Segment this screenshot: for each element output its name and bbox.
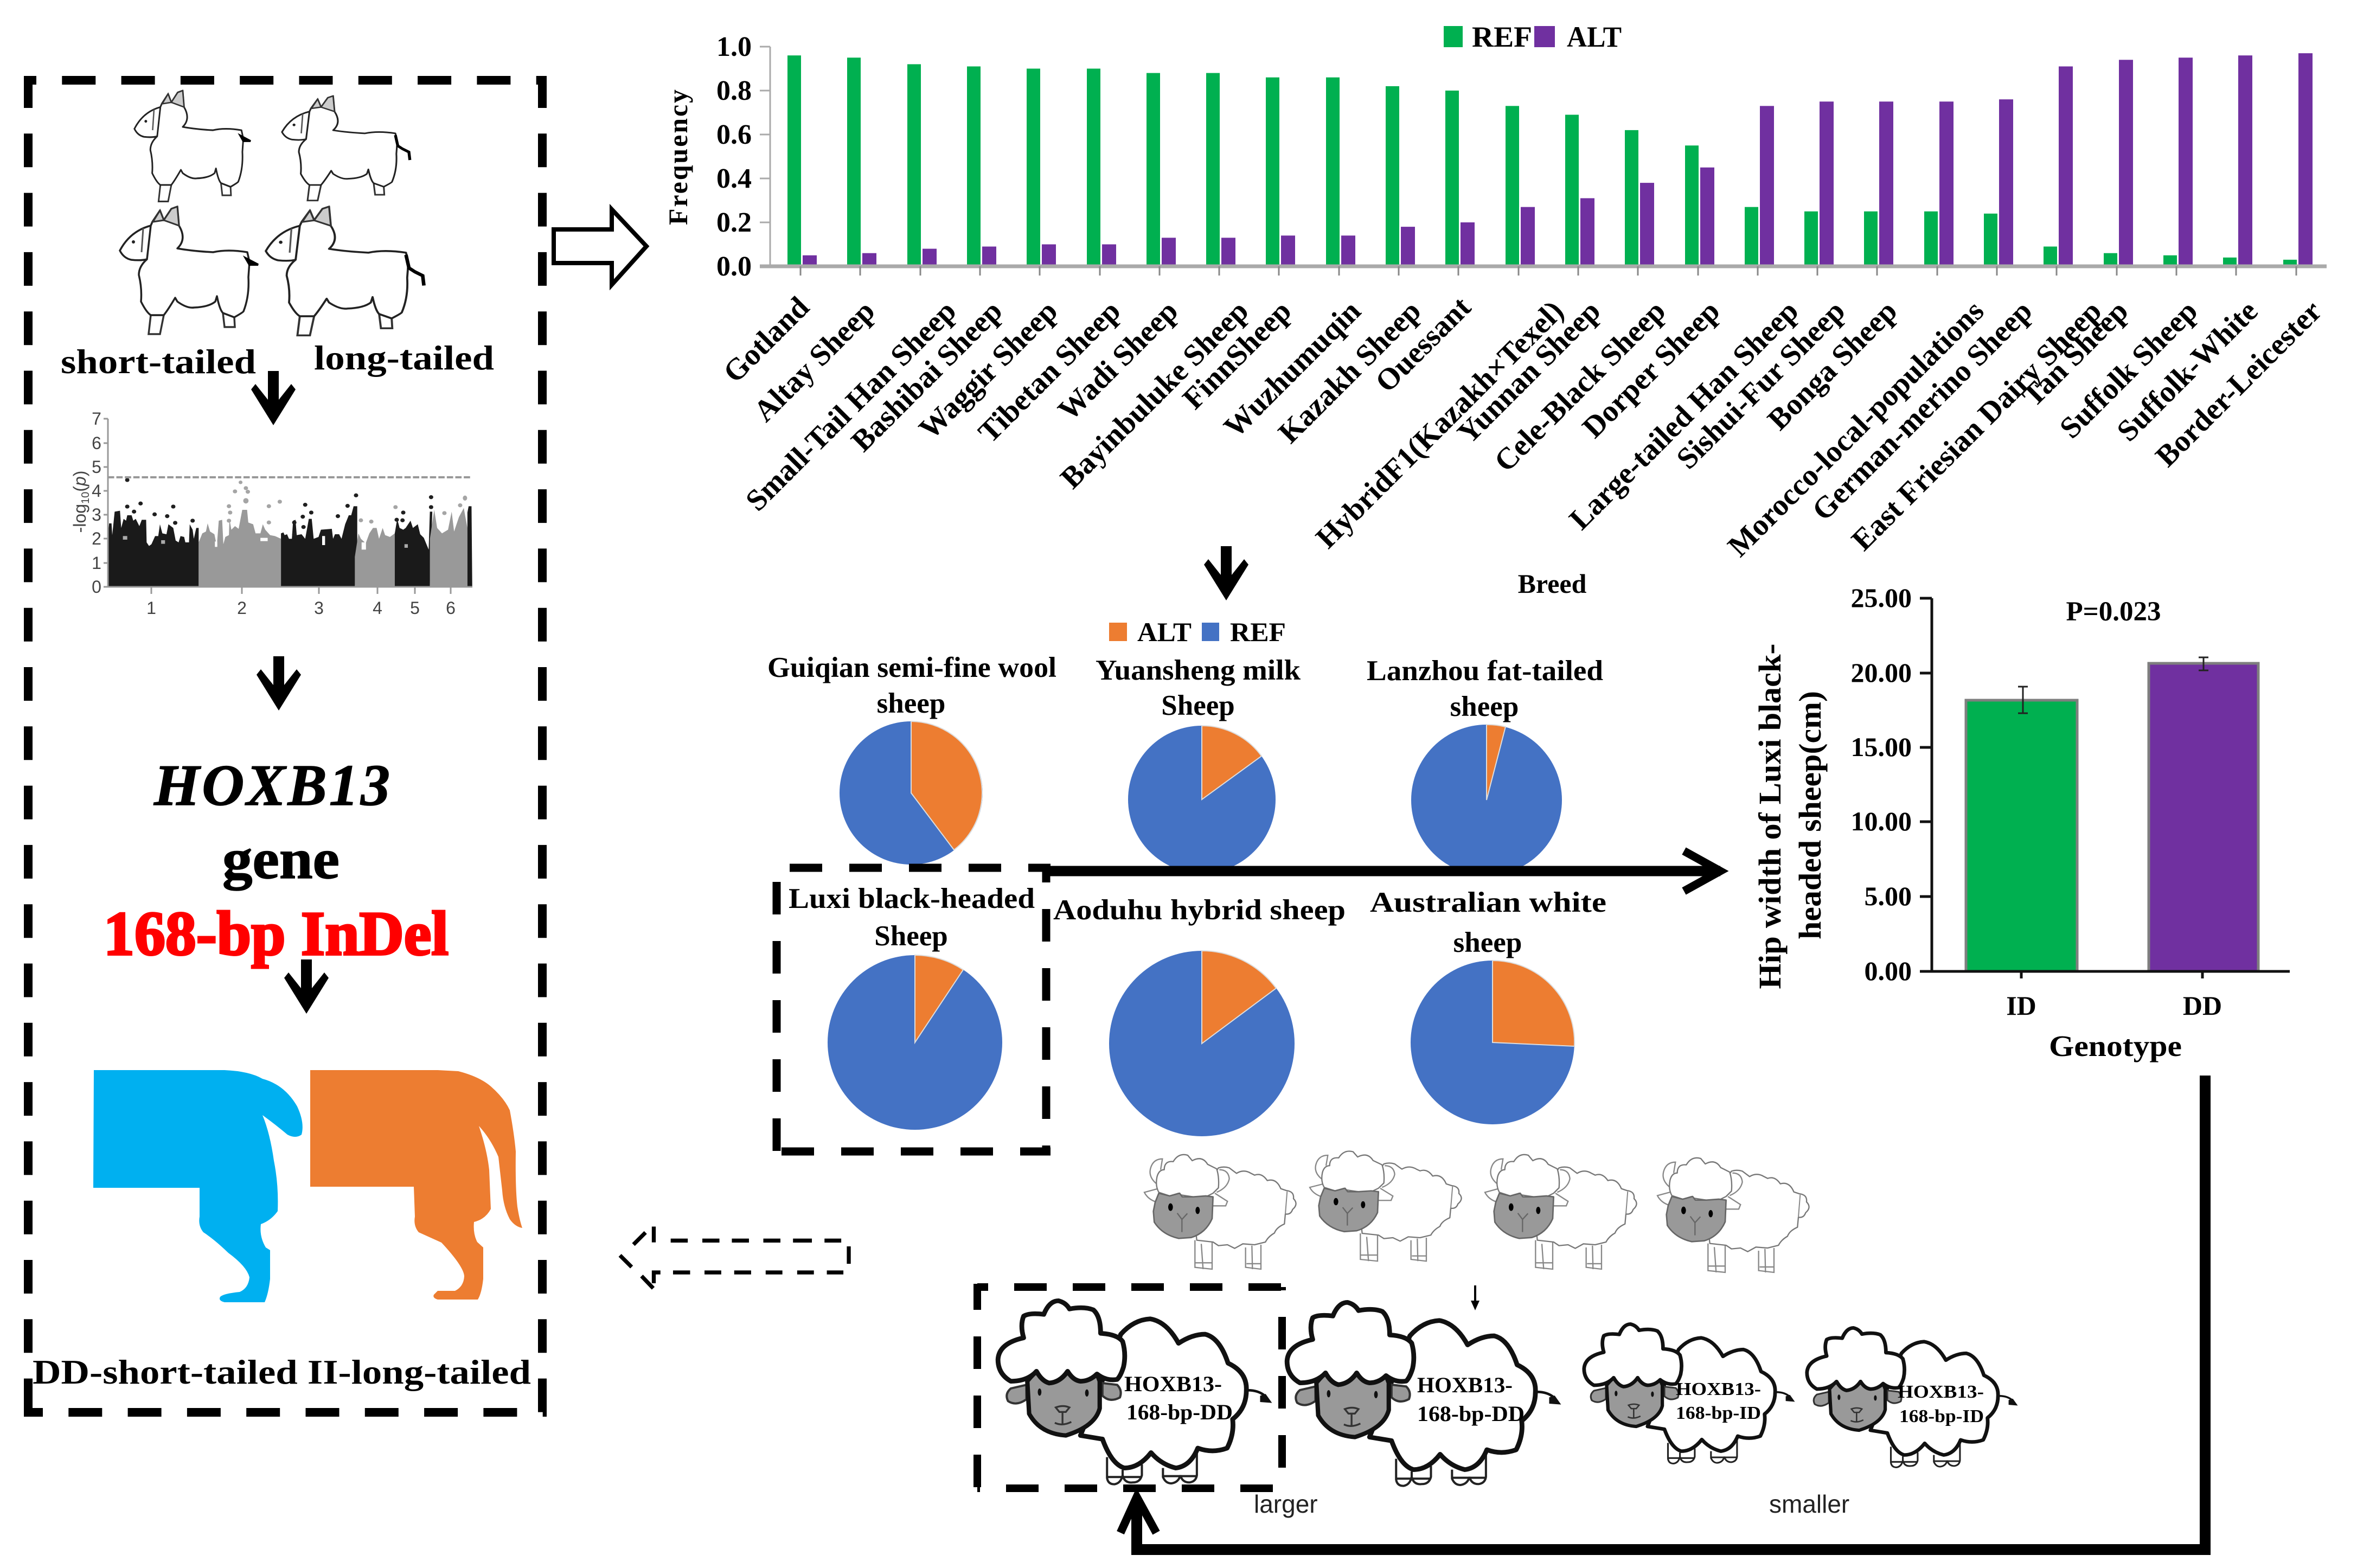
icon: DD sheep 2: 168-bp-DD [1417,1401,1525,1426]
chart: hip width by genotype: DD [2183,990,2222,1021]
label: smaller: smaller [1769,1490,1849,1518]
y axis labels: 0.2 [716,207,752,238]
chart: allele frequency by breed [663,21,2328,599]
icon: DD sheep 1: HOXB13- [1124,1372,1222,1396]
pie: Aoduhu hybrid sheep [1053,894,1346,1136]
pie: Aoduhu hybrid sheep: Aoduhu hybrid sheep [1053,894,1346,926]
y axis ticks: 10.00 [1850,806,1912,836]
axis numbers [92,409,456,618]
breed labels: Bonga Sheep [1761,294,1904,437]
icon: ID sheep 3: HOXB13- [1676,1379,1761,1399]
breed labels: Suffolk Sheep [2053,294,2204,445]
legend: REF and ALT: REF [1472,21,1532,53]
arrow: small down arrow [1471,1285,1479,1310]
callout: Luxi black-headed sheep dashed box [772,864,1051,1155]
axis numbers: 6 [446,598,456,618]
breed labels: FinnSheep [1176,294,1298,416]
y axis labels: 0.0 [716,251,752,282]
legend: pie ALT and REF: ALT [1137,617,1192,647]
arrow: thick elbow from hip width chart to selected sheep [1120,1076,2205,1550]
arrow: hollow right arrow to frequency chart [554,209,646,285]
y axis labels [716,31,752,282]
axes [760,47,2327,276]
axis numbers: 0 [92,577,101,597]
legend: pie ALT and REF: REF [1230,617,1286,647]
label: larger: larger [1254,1490,1318,1518]
icon: short-tailed sheep 3 [120,207,258,334]
pie: Luxi black-headed Sheep: Luxi black-headed [789,883,1035,914]
breed labels: Altay Sheep [747,294,881,428]
callout: selected DD sheep dashed box [977,1284,1282,1492]
axis title: ( [70,486,89,492]
y axis ticks: 0.00 [1865,956,1912,986]
legend: REF and ALT: ALT [1567,21,1622,53]
chart: hip width by genotype [1752,583,2290,1063]
breed labels: Yunnan Sheep [1451,294,1607,450]
axis numbers: 7 [92,409,101,428]
variant label: 168-bp InDel [104,899,449,968]
label: long-tailed: long-tailed [314,338,494,377]
y axis ticks: 5.00 [1865,881,1912,911]
points and chromosome blocks [108,477,472,587]
axis numbers: 1 [92,553,101,573]
icon: long-tailed sheep 2 [282,96,410,201]
panel: discovery workflow dashed box [24,76,547,1416]
arrow: frequency chart to pies [1204,546,1248,600]
breed labels: Waggir Sheep [913,294,1064,446]
axis numbers: 2 [237,598,247,618]
icon: upper sheep 4 [1657,1158,1809,1272]
breed labels: HybridF1(Kazakh×Texel) [1309,294,1570,555]
breed labels: Gotland [717,290,816,389]
icon: DD sheep 1: 168-bp-DD [1126,1400,1233,1424]
gene name: HOXB13 [153,753,390,818]
icon: ID sheep 3: 168-bp-ID [1676,1403,1761,1423]
icon: ID sheep 3 [1584,1324,1795,1463]
icon: upper sheep 3 [1485,1155,1637,1269]
bars: REF [787,55,2297,266]
axis numbers: 5 [92,457,101,477]
axis title: -log [70,504,89,533]
legend: REF and ALT [1444,21,1622,53]
bar: DD [2149,663,2258,971]
y axis ticks [1850,583,1912,986]
breed labels: Ouessant [1369,290,1477,399]
x axis title: Breed [1518,568,1587,599]
arrow: dashed left arrow back to workflow [620,1226,849,1288]
icon: upper sheep 1 [1144,1155,1296,1269]
axis numbers: 2 [92,529,101,548]
axis numbers: 3 [314,598,324,618]
y axis labels: 0.8 [716,75,752,106]
icon: DD sheep 1 [998,1301,1272,1484]
arrow: sheep to GWAS [251,371,296,425]
y axis labels: 0.4 [716,163,752,194]
icon: ID sheep 4 [1807,1328,2017,1467]
y axis title: Frequency [663,89,693,225]
breed labels: Bayinbuluke Sheep [1054,294,1255,495]
icon: ID sheep 4: 168-bp-ID [1899,1406,1984,1426]
pie: Guiqian semi-fine wool sheep: sheep [877,688,945,719]
bar: ID [1966,700,2077,971]
y axis labels: 0.6 [716,119,752,150]
breed labels: Kazakh Sheep [1272,294,1427,450]
pie: Guiqian semi-fine wool sheep [767,652,1056,865]
breed labels: Wadi Sheep [1052,294,1184,427]
y axis title: headed sheep(cm) [1792,691,1828,939]
breed labels: Border-Leicester [2149,294,2328,473]
y axis ticks: 20.00 [1850,657,1912,688]
pie: Australian white sheep [1370,887,1606,1124]
pie: Yuansheng milk Sheep: Sheep [1161,690,1235,721]
icon: long-tailed sheep 4 [266,207,424,335]
legend: pie ALT and REF [1109,617,1286,647]
y axis ticks: 15.00 [1850,732,1912,762]
pie: Yuansheng milk Sheep [1096,655,1301,873]
icon: DD sheep 2: HOXB13- [1417,1373,1513,1397]
p value: P=0.023 [2066,597,2161,627]
pie: Australian white sheep: Australian white [1370,887,1606,918]
breed labels: Tan Sheep [2016,294,2135,413]
breed labels: Sishui-Fur Sheep [1670,294,1852,476]
gene label: gene [222,827,340,891]
axis title: 10 [80,492,92,504]
breed labels: Suffolk-White [2111,294,2264,448]
caption: genotype to tail type: DD-short-tailed II-long-tailed [33,1353,531,1391]
axis numbers: 6 [92,433,101,453]
pie: Lanzhou fat-tailed sheep [1367,655,1603,875]
y axis ticks: 25.00 [1850,583,1912,613]
pie: Lanzhou fat-tailed sheep: sheep [1450,691,1519,722]
breed labels: Morocco-local-populations [1721,294,1990,564]
y axis title: Hip width of Luxi black- [1752,643,1788,989]
breed labels: Large-tailed Han Sheep [1563,294,1805,536]
label: short-tailed: short-tailed [61,342,256,381]
y axis labels: 1.0 [716,31,752,62]
breed labels [717,290,2328,564]
y axis title [1752,643,1828,989]
icon: ID sheep 4: HOXB13- [1898,1382,1984,1402]
pie: Australian white sheep: sheep [1453,927,1522,958]
icon: long tail silhouette [310,1070,522,1300]
axis numbers: 1 [146,598,156,618]
pie: Lanzhou fat-tailed sheep: Lanzhou fat-tailed [1367,655,1603,687]
pie: Luxi black-headed Sheep: Sheep [874,920,948,952]
axis numbers: 4 [373,598,382,618]
icon: short-tailed sheep 1 [134,91,251,201]
icon: upper sheep 2 [1310,1151,1462,1261]
arrow: InDel to phenotype [284,959,329,1014]
arrow: GWAS to gene [257,656,301,711]
genotype labels: ID [2006,990,2036,1021]
pie: Guiqian semi-fine wool sheep: Guiqian semi-fine wool [767,652,1056,683]
icon: short tail silhouette [93,1070,303,1302]
axis numbers: 5 [410,598,420,618]
axis numbers: 3 [92,505,101,524]
breed labels: Tibetan Sheep [972,294,1127,450]
breed labels: Wuzhumuqin [1218,294,1367,444]
breed labels: Cele-Black Sheep [1488,294,1672,478]
arrow: thick line from pies to hip width chart [1047,851,1720,891]
pie: Luxi black-headed Sheep [789,883,1035,1130]
pie: Yuansheng milk Sheep: Yuansheng milk [1096,655,1301,686]
icon: DD sheep 2 [1287,1302,1561,1486]
axis title: p) [70,471,89,486]
bars: ALT [803,53,2313,266]
axis numbers: 4 [92,481,101,501]
breed labels: Dorper Sheep [1576,294,1726,445]
breed labels: Small-Tail Han Sheep [739,294,963,517]
breed labels: Bashibai Sheep [845,294,1009,458]
chart: Manhattan plot [70,409,472,618]
breed labels: East Friesian Dairy Sheep [1845,294,2108,557]
x axis title: Genotype [2049,1029,2182,1063]
breed labels: German-merino Sheep [1805,294,2039,527]
